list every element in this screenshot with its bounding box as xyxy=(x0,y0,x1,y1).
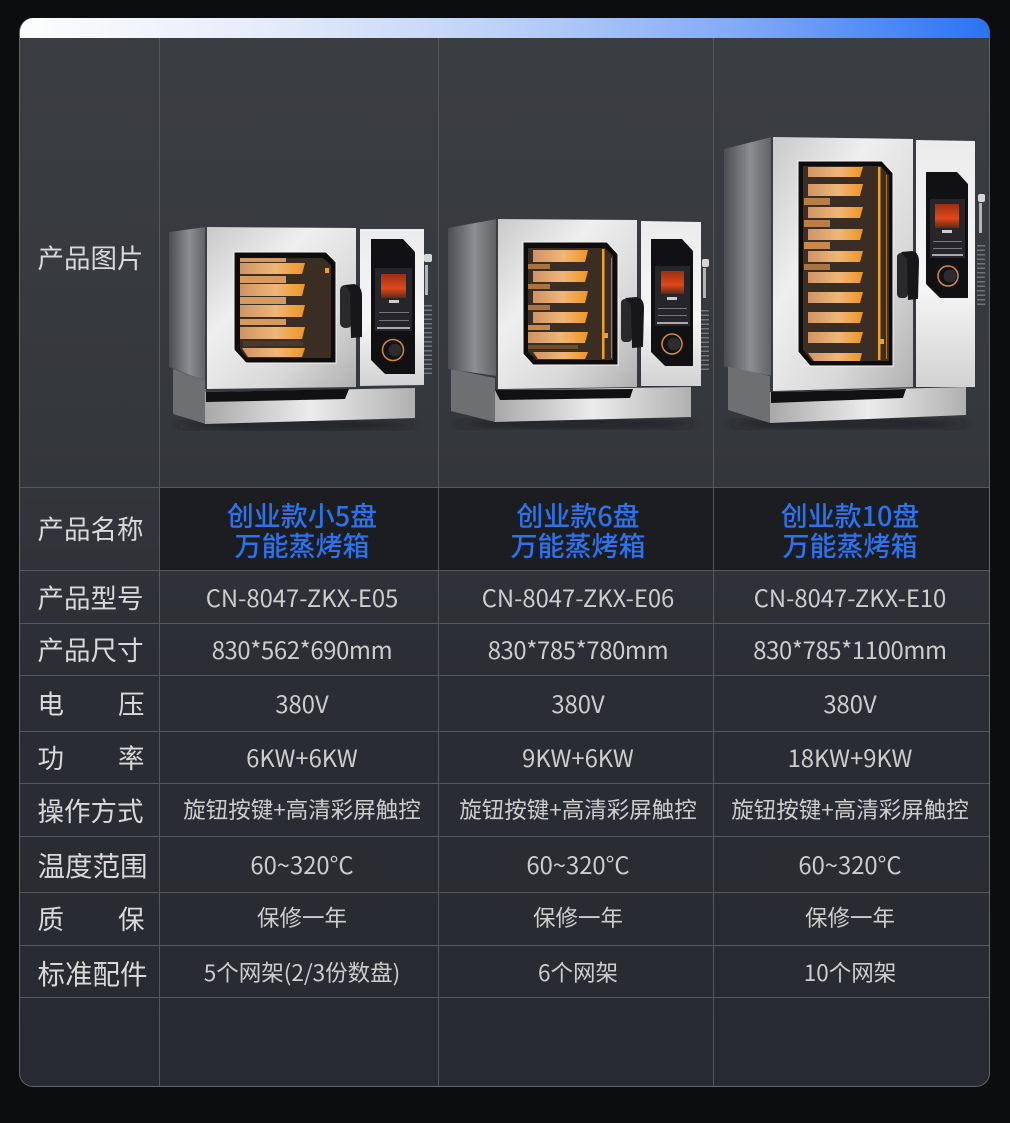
row: product model: CN-8047-ZKX-E10 xyxy=(754,578,946,614)
row: product size: 830*785*1100mm xyxy=(753,631,947,666)
row: voltage: 380V xyxy=(551,685,605,720)
row: product model: CN-8047-ZKX-E05 xyxy=(206,578,398,614)
row: product size: 830*785*780mm xyxy=(488,631,668,666)
row: voltage: 电 xyxy=(38,683,64,722)
row: product model: CN-8047-ZKX-E06 xyxy=(482,578,674,614)
row: product model: 产品型号 xyxy=(38,576,144,616)
row: standard accessories xyxy=(20,945,989,998)
row: standard accessories: 6个网架 xyxy=(538,956,618,988)
window with trays xyxy=(234,252,336,363)
row: product size xyxy=(20,623,989,675)
window with trays xyxy=(798,161,893,366)
oven: small 5 tray xyxy=(169,227,432,430)
door handle xyxy=(340,284,362,338)
row: product name: 创业款小5盘 xyxy=(227,495,377,534)
door handle xyxy=(621,297,644,348)
row: warranty xyxy=(20,892,989,945)
oven: 10 tray xyxy=(724,137,985,429)
door handle xyxy=(897,251,919,300)
row: temperature range xyxy=(20,836,989,892)
row: product model xyxy=(20,570,989,623)
row: operation mode: 旋钮按键+高清彩屏触控 xyxy=(183,793,421,825)
row: operation mode xyxy=(20,783,989,836)
dark product name band xyxy=(160,488,989,570)
row: product name: 万能蒸烤箱 xyxy=(510,525,646,564)
row: power: 18KW+9KW xyxy=(788,739,912,774)
row: power: 9KW+6KW xyxy=(522,739,634,774)
row: warranty: 保 xyxy=(118,898,144,936)
row: voltage: 380V xyxy=(823,685,877,720)
row: product name: 创业款6盘 xyxy=(516,495,640,534)
control panel xyxy=(651,239,693,366)
row: temperature range: 60~320°C xyxy=(798,846,902,881)
window with trays xyxy=(523,242,618,365)
row: power: 6KW+6KW xyxy=(246,739,358,774)
row: standard accessories: 5个网架(2/3份数盘) xyxy=(204,956,400,988)
row: product name: 产品名称 xyxy=(38,508,144,546)
row: temperature range: 60~320°C xyxy=(250,846,354,881)
row: operation mode: 旋钮按键+高清彩屏触控 xyxy=(731,793,969,825)
row: product name xyxy=(20,487,989,570)
row: voltage: 380V xyxy=(275,685,329,720)
row: operation mode: 旋钮按键+高清彩屏触控 xyxy=(459,793,697,825)
row: power: 率 xyxy=(118,737,144,776)
row: warranty: 保修一年 xyxy=(257,901,347,933)
control panel xyxy=(371,239,415,374)
oven: 6 tray xyxy=(448,219,709,429)
row: product size: 产品尺寸 xyxy=(38,629,144,668)
row: warranty: 保修一年 xyxy=(533,901,623,933)
row: warranty: 质 xyxy=(38,898,64,936)
row: voltage: 压 xyxy=(118,683,144,722)
row: product image label: 产品图片 xyxy=(38,237,144,276)
row: standard accessories: 标准配件 xyxy=(38,952,148,992)
row: product size: 830*562*690mm xyxy=(212,631,392,666)
row: product name: 万能蒸烤箱 xyxy=(234,525,370,564)
row: power: 功 xyxy=(38,737,64,776)
row: product name: 万能蒸烤箱 xyxy=(782,525,918,564)
row: product name: 创业款10盘 xyxy=(781,495,919,534)
row: operation mode: 操作方式 xyxy=(38,790,144,828)
row: temperature range: 60~320°C xyxy=(526,846,630,881)
row: power xyxy=(20,731,989,783)
row: warranty: 保修一年 xyxy=(805,901,895,933)
row: voltage xyxy=(20,675,989,731)
row: standard accessories: 10个网架 xyxy=(804,956,896,988)
gradient top bar xyxy=(19,18,990,38)
control panel xyxy=(926,172,968,298)
row: temperature range: 温度范围 xyxy=(38,844,148,884)
